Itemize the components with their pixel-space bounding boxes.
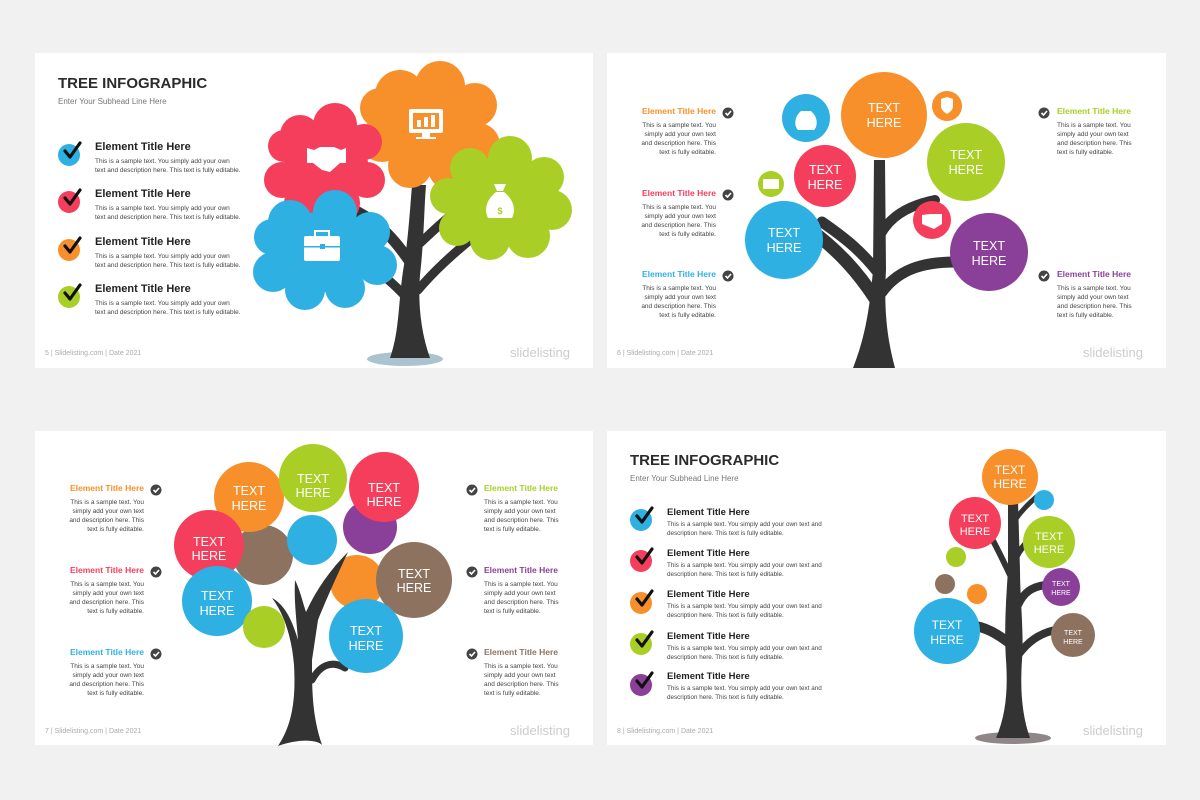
circles: TEXT (297, 472, 329, 486)
right text blocks: text is fully editable. (1057, 149, 1114, 156)
right text blocks: Element Title Here (484, 565, 558, 575)
cloud: green with money bag icon (430, 136, 572, 260)
list item 4: text and description here. This text is fully editable. (95, 309, 241, 316)
list items: description here. This text is fully editable. (667, 571, 784, 578)
right text blocks: text is fully editable. (484, 608, 541, 615)
list items: This is a sample text. You simply add your own text and (667, 685, 822, 692)
left text blocks: and description here. This (69, 599, 145, 606)
list item 3 (58, 236, 241, 269)
right text blocks: simply add your own text (484, 672, 556, 679)
circles: HERE (1034, 544, 1064, 556)
check icons (150, 484, 478, 660)
circles: HERE (808, 178, 842, 192)
left text blocks: simply add your own text (72, 672, 144, 679)
list items: description here. This text is fully editable. (667, 654, 784, 661)
circles: HERE (397, 581, 431, 595)
left text blocks: simply add your own text (644, 294, 716, 301)
list item 1 (58, 141, 241, 174)
circles: TEXT (868, 101, 900, 115)
circles: TEXT (995, 463, 1026, 477)
footer: 8 | Slidelisting.com | Date 2021 (617, 728, 713, 735)
circles: TEXT (961, 513, 989, 525)
subhead: Enter Your Subhead Line Here (630, 474, 739, 483)
right text blocks: simply add your own text (484, 590, 556, 597)
list item 3: This is a sample text. You simply add your own (95, 253, 230, 260)
circles: HERE (972, 254, 1006, 268)
circles: HERE (767, 241, 801, 255)
list item 2 (58, 188, 241, 221)
title: TREE INFOGRAPHIC (58, 75, 207, 92)
list item 3: text and description here. This text is fully editable. (95, 262, 241, 269)
list item 1: Element Title Here (95, 141, 191, 153)
right text blocks: This is a sample text. You (484, 581, 558, 588)
left text blocks: simply add your own text (72, 590, 144, 597)
left text blocks: This is a sample text. You (70, 499, 144, 506)
footer: 6 | Slidelisting.com | Date 2021 (617, 350, 713, 357)
list items: This is a sample text. You simply add your own text and (667, 603, 822, 610)
left text blocks: text is fully editable. (87, 690, 144, 697)
list items: Element Title Here (667, 589, 750, 600)
left text blocks: Element Title Here (642, 269, 716, 279)
left text blocks: Element Title Here (70, 483, 144, 493)
circles (174, 444, 452, 648)
circles: TEXT (1035, 531, 1063, 543)
list item 4 (58, 283, 241, 316)
tree shadow (975, 732, 1051, 744)
circles: HERE (367, 495, 401, 509)
left text blocks: Element Title Here (642, 188, 716, 198)
circles: HERE (930, 633, 964, 647)
circle: blue bottom: TEXT (350, 624, 382, 638)
list items: Element Title Here (667, 631, 750, 642)
slide 4: tall tree with list (607, 431, 1166, 745)
circles: HERE (867, 116, 901, 130)
left text blocks: and description here. This (641, 303, 717, 310)
list items: description here. This text is fully editable. (667, 530, 784, 537)
right text blocks: text is fully editable. (484, 526, 541, 533)
left text blocks: and description here. This (641, 222, 717, 229)
circles: TEXT (1052, 581, 1071, 588)
left text blocks: simply add your own text (644, 213, 716, 220)
circles: TEXT (201, 589, 233, 603)
circles: TEXT (950, 148, 982, 162)
list items: description here. This text is fully editable. (667, 612, 784, 619)
tree trunk (272, 552, 348, 746)
right text blocks: This is a sample text. You (1057, 285, 1131, 292)
right text blocks: and description here. This (484, 599, 559, 606)
left text blocks: simply add your own text (644, 131, 716, 138)
circles: TEXT (398, 567, 430, 581)
check icons (722, 108, 1050, 282)
cloud: orange with monitor icon (360, 61, 500, 190)
circles: TEXT (1064, 630, 1083, 637)
left text blocks (69, 483, 145, 697)
circles: HERE (296, 486, 330, 500)
list item 1: text and description here. This text is fully editable. (95, 167, 241, 174)
list items: This is a sample text. You simply add your own text and (667, 562, 822, 569)
left text blocks: Element Title Here (642, 106, 716, 116)
subhead: Enter Your Subhead Line Here (58, 97, 167, 106)
footer: 7 | Slidelisting.com | Date 2021 (45, 728, 141, 735)
list item 4: This is a sample text. You simply add your own (95, 300, 230, 307)
circles: TEXT (973, 239, 1005, 253)
circle: blue bottom (329, 599, 403, 673)
list item 1: This is a sample text. You simply add your own (95, 158, 230, 165)
footer: 5 | Slidelisting.com | Date 2021 (45, 350, 141, 357)
left text blocks: This is a sample text. You (642, 285, 716, 292)
brand: slidelisting (1083, 723, 1143, 738)
list item 2: text and description here. This text is fully editable. (95, 214, 241, 221)
left text blocks: Element Title Here (70, 565, 144, 575)
circles: HERE (1051, 590, 1071, 597)
list items: Element Title Here (667, 548, 750, 559)
cloud: red with handshake icon (264, 103, 385, 223)
left text blocks (641, 106, 717, 319)
left text blocks: This is a sample text. You (70, 581, 144, 588)
list items: Element Title Here (667, 671, 750, 682)
list item 4: Element Title Here (95, 283, 191, 295)
right text blocks: text is fully editable. (484, 690, 541, 697)
left text blocks: simply add your own text (72, 508, 144, 515)
list items (630, 507, 822, 701)
left text blocks: text is fully editable. (659, 149, 716, 156)
left text blocks: text is fully editable. (659, 231, 716, 238)
circles: TEXT (193, 535, 225, 549)
list items: Element Title Here (667, 507, 750, 518)
right text blocks: and description here. This (484, 517, 559, 524)
list items: description here. This text is fully editable. (667, 694, 784, 701)
circles: HERE (949, 163, 983, 177)
list item 3: Element Title Here (95, 236, 191, 248)
right text blocks: text is fully editable. (1057, 312, 1114, 319)
right text blocks (1057, 106, 1132, 319)
right text blocks: Element Title Here (1057, 106, 1131, 116)
list items: This is a sample text. You simply add your own text and (667, 521, 822, 528)
left text blocks: and description here. This (641, 140, 717, 147)
left text blocks: Element Title Here (70, 647, 144, 657)
circles: HERE (232, 499, 266, 513)
circles: HERE (1063, 639, 1083, 646)
left text blocks: text is fully editable. (87, 608, 144, 615)
brand: slidelisting (1083, 345, 1143, 360)
right text blocks: Element Title Here (484, 483, 558, 493)
circles: HERE (200, 604, 234, 618)
circles (914, 449, 1095, 664)
circles: TEXT (809, 163, 841, 177)
right text blocks: This is a sample text. You (484, 499, 558, 506)
tree trunk (970, 494, 1055, 738)
title: TREE INFOGRAPHIC (630, 452, 779, 469)
circles: HERE (192, 549, 226, 563)
right text blocks: simply add your own text (1057, 131, 1129, 138)
right text blocks: Element Title Here (1057, 269, 1131, 279)
right text blocks: simply add your own text (1057, 294, 1129, 301)
tree trunk (808, 160, 955, 368)
right text blocks: and description here. This (1057, 140, 1132, 147)
right text blocks: Element Title Here (484, 647, 558, 657)
slide 1: tree infographic with clouds (35, 53, 593, 368)
left text blocks: and description here. This (69, 517, 145, 524)
left text blocks: This is a sample text. You (642, 204, 716, 211)
list item 2: This is a sample text. You simply add your own (95, 205, 230, 212)
right text blocks: and description here. This (484, 681, 559, 688)
right text blocks: and description here. This (1057, 303, 1132, 310)
circles: TEXT (368, 481, 400, 495)
list item 2: Element Title Here (95, 188, 191, 200)
left text blocks: text is fully editable. (87, 526, 144, 533)
tree trunk (350, 185, 470, 358)
brand: slidelisting (510, 723, 570, 738)
circles: TEXT (233, 484, 265, 498)
circles: TEXT (768, 226, 800, 240)
left text blocks: and description here. This (69, 681, 145, 688)
right text blocks (484, 483, 559, 697)
tree shadow (367, 352, 443, 366)
right text blocks: This is a sample text. You (484, 663, 558, 670)
circle: blue bottom: HERE (349, 639, 383, 653)
circles (745, 72, 1028, 291)
slide 3: dense circle tree (35, 431, 593, 746)
circles: HERE (993, 477, 1027, 491)
right text blocks: This is a sample text. You (1057, 122, 1131, 129)
cloud: blue with briefcase icon (253, 190, 397, 310)
left text blocks: This is a sample text. You (70, 663, 144, 670)
circles: TEXT (932, 618, 963, 632)
left text blocks: text is fully editable. (659, 312, 716, 319)
circles: HERE (960, 526, 990, 538)
left text blocks: This is a sample text. You (642, 122, 716, 129)
list items: This is a sample text. You simply add your own text and (667, 645, 822, 652)
slide 2: circle tree with side texts (607, 53, 1166, 368)
brand: slidelisting (510, 345, 570, 360)
right text blocks: simply add your own text (484, 508, 556, 515)
cloud: green with money bag icon: $ (497, 206, 503, 216)
